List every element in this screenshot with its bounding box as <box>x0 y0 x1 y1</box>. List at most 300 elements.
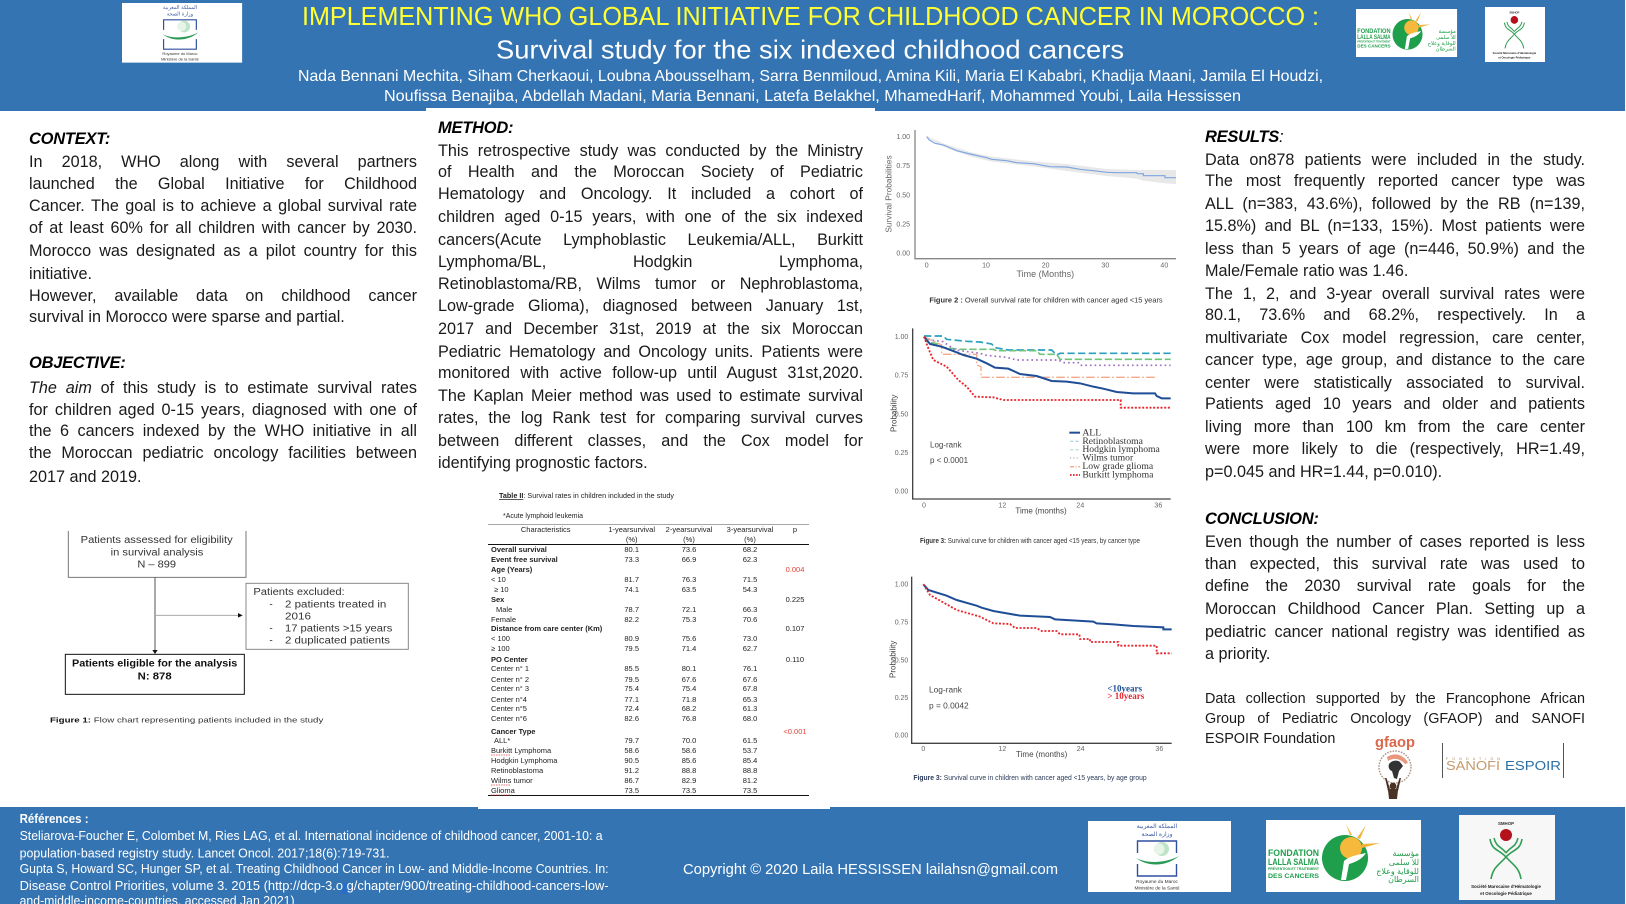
text: method: Retinoblastoma/RB, Wilms tumor or Nephroblastoma, <box>438 275 863 293</box>
y axis labels: 0.50 <box>896 192 910 199</box>
authors: Nada Bennani Mechita, Siham Cherkaoui, Loubna Abousselham, Sarra Benmiloud, Amina Kili, Maria El Kababri, Khadija Maani, Jamila El Houdzi, <box>298 68 1323 85</box>
row labels: Burkitt Lymphoma <box>491 746 552 755</box>
column: 2-year survival: 80.1 <box>682 664 696 673</box>
y axis labels: 0.50 <box>895 411 908 418</box>
caption: figure 2: Figure 2 : Overall survival rate for children with cancer aged <15 years <box>929 296 1163 305</box>
curve: under 10 years <box>923 584 1172 629</box>
text: conclusion: a priority. <box>1205 645 1270 663</box>
box: excluded patients: 17 patients >15 years <box>285 624 392 635</box>
column: 3-year survival: 67.6 <box>743 675 757 684</box>
column: 1-year survival: 82.6 <box>624 714 639 723</box>
heading: context: CONTEXT: <box>29 130 110 148</box>
row labels: Wilms tumor <box>491 776 533 785</box>
references: population-based registry study. Lancet Oncol. 2017;18(6):719-731. <box>20 846 390 860</box>
logo: ministry of health (header): Royaume du Maroc <box>162 51 197 56</box>
logo: fondation lalla salma (footer): DES CANCERS <box>1268 873 1320 880</box>
text: conclusion <box>1205 533 1585 663</box>
row labels: Glioma <box>491 786 516 795</box>
column: 2-year survival: 68.2 <box>682 704 696 713</box>
column: 3-year survival <box>743 545 757 795</box>
panel: method <box>438 119 864 472</box>
column: 2-year survival <box>682 545 696 795</box>
column: 1-year survival: 82.2 <box>624 615 639 624</box>
column: 2-year survival: 73.5 <box>682 786 696 795</box>
copyright: Copyright © 2020 Laila HESSISSEN lailahsn@gmail.com <box>683 861 1058 878</box>
logo: smhop society (header): Société Marocaine d'Hématologie <box>1493 51 1537 55</box>
table header: (%) <box>744 535 756 544</box>
column: 1-year survival: 79.7 <box>624 736 639 745</box>
references <box>20 811 609 904</box>
text: objective: 2017 and 2019. <box>29 468 142 486</box>
column: p values: 0.004 <box>786 565 804 574</box>
log-rank note: p < 0.0001 <box>930 456 969 465</box>
text: method: Low-grade Glioma), diagnosed between January 1st, <box>438 297 863 315</box>
text: results: cancer type, age group, and distance to the care <box>1205 351 1585 369</box>
row labels: Center n°5 <box>491 704 527 713</box>
axis titles: Survival Probabilities <box>884 155 894 233</box>
row labels: < 10 <box>491 575 506 584</box>
y axis labels: 0.50 <box>895 657 908 664</box>
x axis labels: 24 <box>1077 746 1085 753</box>
y axis labels: 1.00 <box>895 582 908 589</box>
column: 3-year survival: 62.3 <box>743 555 757 564</box>
row labels: Retinoblastoma <box>491 766 544 775</box>
y axis labels: 0.25 <box>895 450 908 457</box>
column: 3-year survival: 71.5 <box>743 575 757 584</box>
logo: fondation lalla salma (footer): PRÉVENTION ET TRAITEMENT <box>1268 866 1320 871</box>
text: method: Hematology and Oncology. It included a cohort of <box>438 185 863 203</box>
box: excluded patients: 2016 <box>285 611 312 622</box>
heading: results: RESULTS: <box>1205 128 1283 146</box>
row labels: Overall survival <box>491 545 547 554</box>
text: funding acknowledgement <box>1205 690 1585 746</box>
caption: figure 3: Figure 3: Survival curve for children with cancer aged <15 years, by cancer type <box>920 536 1140 545</box>
text: results <box>1205 151 1585 481</box>
y axis labels <box>895 582 908 740</box>
curve: 10 years and over <box>923 584 1172 653</box>
curve: wilms tumor <box>924 337 1171 365</box>
axis titles <box>884 155 1074 279</box>
axis titles: Time (months) <box>1016 750 1068 759</box>
panel: objective <box>29 354 418 486</box>
text: objective: the Moroccan pediatric oncology facilities between <box>29 444 417 462</box>
logo: fondation lalla salma (footer): للا سلمى <box>1389 858 1419 867</box>
text: results: were more likely to die (respectively, HR=1.49, <box>1205 440 1585 458</box>
text: funding acknowledgement: Group of Pediatric Oncology (GFAOP) and SANOFI <box>1205 710 1585 726</box>
row labels: Center n°4 <box>491 695 527 704</box>
log-rank note <box>929 685 969 710</box>
column: 2-year survival: 66.9 <box>682 555 696 564</box>
column: 3-year survival: 61.5 <box>743 736 757 745</box>
column: 2-year survival: 88.8 <box>682 766 696 775</box>
logo: ministry of health (footer) <box>1088 821 1231 892</box>
column: 2-year survival: 75.6 <box>682 634 696 643</box>
text: method <box>438 142 864 472</box>
text: conclusion: Moroccan Childhood Cancer Plan. Setting up a <box>1205 600 1585 618</box>
row labels: Distance from care center (Km) <box>491 624 603 633</box>
column: 2-year survival: 67.6 <box>682 675 696 684</box>
row labels: ≥ 100 <box>491 644 510 653</box>
text: results: ALL (n=383, 43.6%), followed by the RB (n=139, <box>1205 195 1585 213</box>
y axis labels: 0.75 <box>895 373 908 380</box>
column: 3-year survival: 73.5 <box>743 786 757 795</box>
box: excluded patients: - <box>269 624 273 635</box>
logo: fondation sanofi espoir <box>1442 743 1564 778</box>
text: objective: the 6 cancers indexed by the WHO initiative in all <box>29 422 417 440</box>
text: method: The Kaplan Meier method was used to estimate survival <box>438 387 863 405</box>
column: 2-year survival: 76.3 <box>682 575 696 584</box>
text: method: cancers(Acute Lymphoblastic Leukemia/ALL, Burkitt <box>438 231 863 249</box>
logo: fondation lalla salma (footer): مؤسسة <box>1392 849 1419 858</box>
logo: ministry of health (header) <box>122 3 242 63</box>
column: 1-year survival: 73.5 <box>624 786 639 795</box>
references: Disease Control Priorities, volume 3. 2015 (http://dcp-3.o g/chapter/900/treating-childhood-cancers-low- <box>20 878 609 893</box>
y axis labels: 0.75 <box>895 620 908 627</box>
survival curve <box>927 137 1176 178</box>
column: 3-year survival: 88.8 <box>743 766 757 775</box>
text: method: Pediatric Hematology and Oncology units. Patients were <box>438 343 863 361</box>
row labels: Center n°6 <box>491 714 527 723</box>
column: 1-year survival: 85.5 <box>624 664 639 673</box>
x axis labels: 20 <box>1042 263 1050 270</box>
panel: results <box>1205 128 1585 481</box>
column: 1-year survival: 81.7 <box>624 575 639 584</box>
column: 2-year survival: 72.1 <box>682 605 696 614</box>
box: excluded patients: 2 duplicated patients <box>285 636 390 647</box>
axis titles <box>890 395 1067 515</box>
column: 2-year survival: 70.0 <box>682 736 696 745</box>
y axis labels: 1.00 <box>896 134 910 141</box>
column: 2-year survival: 75.4 <box>682 684 696 693</box>
row labels: Male <box>496 605 512 614</box>
column: p values: <0.001 <box>783 727 807 736</box>
logo: ministry of health (footer): Royaume du Maroc <box>1136 879 1179 885</box>
log-rank note <box>930 440 969 465</box>
column: 3-year survival: 76.1 <box>743 664 757 673</box>
row labels: < 100 <box>491 634 510 643</box>
arrow: to exclusions <box>155 613 243 618</box>
row labels: Center n° 3 <box>491 684 529 693</box>
logo: fondation lalla salma (footer): FONDATION <box>1268 848 1319 858</box>
text: results: less than 5 years of age (n=446, 50.9%) and the <box>1205 240 1585 258</box>
column: 3-year survival: 85.4 <box>743 756 757 765</box>
log-rank note: Log-rank <box>929 685 963 695</box>
box: eligible patients <box>65 654 244 694</box>
text: context: Cancer. The goal is to achieve a global survival rate <box>29 197 417 215</box>
logo: smhop society (footer): et Oncologie Pédiatrique <box>1480 891 1532 896</box>
column: 2-year survival: 71.4 <box>682 644 696 653</box>
column: 3-year survival: 70.6 <box>743 615 757 624</box>
text: objective: The aim of this study is to estimate survival rates <box>29 378 417 396</box>
logo: smhop society (footer) <box>1459 815 1555 900</box>
table header: 2-yearsurvival <box>666 525 713 534</box>
logo: fondation lalla salma (header): PRÉVENTION ET TRAITEMENT <box>1357 40 1391 43</box>
log-rank note: Log-rank <box>930 440 963 449</box>
box: assessed patients: Patients assessed for eligibility <box>81 535 233 546</box>
column: 1-year survival: 79.5 <box>624 644 639 653</box>
logo: smhop society (header) <box>1485 7 1545 62</box>
text: method: children aged 0-15 years, with one of the six indexed <box>438 208 863 226</box>
log-rank note: p = 0.0042 <box>929 700 969 710</box>
legend <box>1069 427 1161 480</box>
logo: ministry of health (header): Ministère de la Santé <box>161 57 200 62</box>
logo: fondation lalla salma (header): DES CANCERS <box>1357 44 1391 49</box>
box: excluded patients: Patients excluded: <box>253 587 345 598</box>
table title: Table II: Survival rates in children included in the study <box>499 491 674 500</box>
box: assessed patients <box>68 531 246 577</box>
text: results: The most frequently reported cancer type was <box>1205 172 1585 190</box>
y axis labels: 0.00 <box>896 251 910 258</box>
logo: gfaop <box>1375 735 1415 799</box>
table header: (%) <box>683 535 695 544</box>
legend: Hodgkin lymphoma <box>1082 444 1161 455</box>
logo: fondation lalla salma (footer): LALLA SALMA <box>1268 857 1319 867</box>
column: p values: 0.225 <box>786 595 804 604</box>
column: 3-year survival: 65.3 <box>743 695 757 704</box>
chart: figure 2 overall survival <box>884 130 1176 305</box>
row labels: Sex <box>491 595 505 604</box>
column: 2-year survival: 76.8 <box>682 714 696 723</box>
column: 3-year survival: 62.7 <box>743 644 757 653</box>
x axis labels: 12 <box>998 746 1006 753</box>
column: 3-year survival: 81.2 <box>743 776 757 785</box>
panel: context <box>29 130 417 326</box>
legend <box>1107 683 1145 701</box>
y axis labels: 0.00 <box>895 733 908 740</box>
legend: Burkitt lymphoma <box>1082 469 1154 480</box>
x axis labels <box>921 746 1163 753</box>
row labels: Female <box>491 615 516 624</box>
x axis labels: 36 <box>1155 746 1163 753</box>
y axis labels: 1.00 <box>895 334 908 341</box>
text: results: Patients aged 10 years and older and patients <box>1205 395 1585 413</box>
logo: fondation lalla salma (header) <box>1356 9 1457 57</box>
column: 1-year survival: 79.5 <box>624 675 639 684</box>
text: method: between different classes, and the Cox model for <box>438 432 863 450</box>
subtitle: Survival study for the six indexed childhood cancers <box>496 34 1124 64</box>
x axis labels: 0 <box>921 746 925 753</box>
row labels: Center n° 2 <box>491 675 529 684</box>
arrow: down <box>152 577 158 654</box>
text: results: 80.1, 73.6% and 68.2%, respectively. In a <box>1205 306 1585 324</box>
references: Références : <box>20 811 89 826</box>
logo: fondation lalla salma (footer): للوقاية وعلاج <box>1376 867 1419 876</box>
logo: ministry of health (header): المملكة المغربية <box>163 5 197 11</box>
row labels: ≥ 10 <box>494 585 509 594</box>
logo: smhop society (footer): Société Marocaine d'Hématologie <box>1471 884 1541 889</box>
x axis labels: 40 <box>1160 263 1168 270</box>
text: conclusion: Even though the number of cases reported is less <box>1205 533 1585 551</box>
table header: Characteristics <box>521 525 571 534</box>
logo: smhop society (footer): SMHOP <box>1498 821 1514 826</box>
authors <box>298 68 1323 105</box>
column: 3-year survival: 68.0 <box>743 714 757 723</box>
x axis labels: 30 <box>1101 263 1109 270</box>
column: 2-year survival: 58.6 <box>682 746 696 755</box>
table: survival rates <box>488 491 809 796</box>
x axis labels: 0 <box>925 263 929 270</box>
y axis labels: 0.00 <box>895 489 908 496</box>
column: p values: 0.110 <box>786 655 804 664</box>
curve: hodgkin lymphoma <box>924 337 1171 359</box>
axis titles: Time (Months) <box>1016 269 1074 279</box>
curve: all <box>924 337 1171 398</box>
text: results: Male/Female ratio was 1.46. <box>1205 262 1408 280</box>
references: Gupta S, Howard SC, Hunger SP, et al. Treating Childhood Cancer in Low- and Middle-Income Countries. In: <box>20 861 609 876</box>
text: funding acknowledgement: ESPOIR Foundation <box>1205 730 1335 746</box>
text: context: survival in Morocco were sparse and partial. <box>29 308 345 326</box>
text: results: The 1, 2, and 3-year overall survival rates were <box>1205 285 1585 303</box>
heading: conclusion: CONCLUSION: <box>1205 510 1319 528</box>
column: p values: 0.107 <box>786 624 804 633</box>
logo: fondation sanofi espoir: SANOFI <box>1446 759 1500 773</box>
y axis labels <box>896 134 910 258</box>
table header: 1-yearsurvival <box>608 525 655 534</box>
column: 1-year survival: 74.1 <box>624 585 639 594</box>
x axis labels: 12 <box>998 502 1006 509</box>
footer band <box>0 807 1626 904</box>
column: 3-year survival: 67.8 <box>743 684 757 693</box>
legend: ALL <box>1082 427 1101 438</box>
text: method: rates, the log Rank test for comparing survival curves <box>438 409 863 427</box>
table header: p <box>793 525 797 534</box>
y axis labels: 0.25 <box>896 221 910 228</box>
heading: method: METHOD: <box>438 119 513 137</box>
chart: figure 3 survival by age group <box>888 576 1172 782</box>
table header: (%) <box>626 535 638 544</box>
logo: ministry of health (footer): Ministère de la Santé <box>1134 886 1180 892</box>
column: 1-year survival: 75.4 <box>624 684 639 693</box>
text: objective <box>29 378 418 486</box>
heading: objective: OBJECTIVE: <box>29 354 126 372</box>
column: 3-year survival: 73.0 <box>743 634 757 643</box>
y axis labels: 0.75 <box>896 163 910 170</box>
text: method: of Health and the Moroccan Society of Pediatric <box>438 163 863 181</box>
text: results: multivariate Cox model regression, care center, <box>1205 329 1585 347</box>
text: results: Data on878 patients were included in the study. <box>1205 151 1585 169</box>
axis titles: Probability <box>890 395 899 432</box>
row labels: Age (Years) <box>491 565 533 574</box>
box: excluded patients <box>246 583 408 649</box>
column: 1-year survival: 80.1 <box>624 545 639 554</box>
title: IMPLEMENTING WHO GLOBAL INITIATIVE FOR CHILDHOOD CANCER IN MOROCCO : <box>302 1 1319 31</box>
column: 2-year survival: 75.3 <box>682 615 696 624</box>
box: assessed patients: N – 899 <box>137 560 176 571</box>
row labels: PO Center <box>491 655 528 664</box>
x axis labels: 36 <box>1154 502 1162 509</box>
table header: 3-yearsurvival <box>727 525 774 534</box>
row labels: Center n° 1 <box>491 664 529 673</box>
x axis labels <box>922 502 1162 509</box>
table header <box>521 525 797 544</box>
logo: fondation lalla salma (footer): السرطان <box>1388 875 1419 884</box>
text: context: Morocco was designated as a pilot country for this <box>29 242 417 260</box>
header band <box>0 0 1626 111</box>
logo: fondation lalla salma (header): LALLA SALMA <box>1357 35 1391 41</box>
text: conclusion: than expected, this survival rate was used to <box>1205 555 1585 573</box>
logo: fondation sanofi espoir: ESPOIR <box>1505 759 1561 773</box>
text: results: center were statistically associated to survival. <box>1205 374 1585 392</box>
text: method: This retrospective study was conducted by the Ministry <box>438 142 863 160</box>
authors: Noufissa Benajiba, Abdellah Madani, Maria Bennani, Latefa Belakhel, MhamedHarif, Mohammed Youbi, Laila Hessissen <box>384 88 1241 105</box>
legend: Retinoblastoma <box>1082 436 1144 447</box>
text: results: living more than 100 km from the care center <box>1205 418 1585 436</box>
logo: ministry of health (header): وزارة الصحة <box>167 12 194 18</box>
logo: fondation lalla salma (header): للا سلمى <box>1436 35 1456 41</box>
axis titles: Time (months) <box>1015 506 1067 515</box>
column: 3-year survival: 54.3 <box>743 585 757 594</box>
text: context: launched the Global Initiative for Childhood <box>29 175 417 193</box>
axis titles <box>888 641 1068 759</box>
column: 3-year survival: 66.3 <box>743 605 757 614</box>
column: 1-year survival: 77.1 <box>624 695 639 704</box>
column: 3-year survival: 53.7 <box>743 746 757 755</box>
text: method: Lymphoma/BL, Hodgkin Lymphoma, <box>438 253 863 271</box>
column: 1-year survival: 91.2 <box>624 766 639 775</box>
column: p values <box>783 565 807 736</box>
legend: <10years <box>1107 683 1142 693</box>
logo: smhop society (header): SMHOP <box>1509 10 1520 14</box>
logo: fondation lalla salma (header): السرطان <box>1436 46 1456 52</box>
text: objective: for children aged 0-15 years, diagnosed with one of <box>29 401 417 419</box>
text: method: identifying prognostic factors. <box>438 454 648 472</box>
column: 1-year survival: 78.7 <box>624 605 639 614</box>
table note: *Acute lymphoid leukemia <box>503 511 584 520</box>
text: context: of at least 60% for all children with cancer by 2030. <box>29 219 417 237</box>
text: context: initiative. <box>29 265 92 283</box>
logo: fondation lalla salma (header): FONDATION <box>1357 29 1391 35</box>
curve: burkitt lymphoma <box>924 337 1171 408</box>
axes <box>915 130 1176 259</box>
references: Steliarova-Foucher E, Colombet M, Ries LAG, et al. International incidence of childhood cancer, 2001-10: a <box>20 828 603 843</box>
row labels: Cancer Type <box>491 727 535 736</box>
column: 1-year survival: 80.9 <box>624 634 639 643</box>
panel: conclusion <box>1205 510 1585 663</box>
column: 2-year survival: 73.6 <box>682 545 696 554</box>
x axis labels: 0 <box>922 502 926 509</box>
text: results: p=0.045 and HR=1.44, p=0.010). <box>1205 463 1442 481</box>
text: context <box>29 153 417 326</box>
logo: smhop society (header): et Oncologie Pédiatrique <box>1498 56 1531 60</box>
text: method: monitored with active follow-up until August 31st,2020. <box>438 364 863 382</box>
axes <box>912 577 1172 743</box>
column: 1-year survival: 58.6 <box>624 746 639 755</box>
column: 1-year survival: 90.5 <box>624 756 639 765</box>
text: funding acknowledgement: Data collection supported by the Francophone African <box>1205 690 1585 706</box>
confidence band <box>927 136 1176 184</box>
logo: fondation lalla salma (footer) <box>1266 820 1421 892</box>
caption: figure 1: Figure 1: Flow chart representing patients included in the study <box>50 715 324 724</box>
column: 1-year survival: 73.3 <box>624 555 639 564</box>
column: 2-year survival: 85.6 <box>682 756 696 765</box>
box: eligible patients: Patients eligible for the analysis <box>72 659 238 670</box>
axis titles: Probability <box>888 641 897 678</box>
column: 3-year survival: 68.2 <box>743 545 757 554</box>
axes <box>913 328 1171 499</box>
text: method: 2017 and December 31st, 2019 at the six Moroccan <box>438 320 863 338</box>
text: context: However, available data on childhood cancer <box>29 286 417 304</box>
box: assessed patients: in survival analysis <box>111 547 203 558</box>
column: 1-year survival: 86.7 <box>624 776 639 785</box>
curve: low grade glioma <box>924 337 1157 377</box>
logo: ministry of health (footer): وزارة الصحة <box>1142 831 1173 838</box>
box: eligible patients: N: 878 <box>138 671 172 682</box>
column: 1-year survival <box>624 545 639 795</box>
text: conclusion: pediatric cancer national registry was identified as <box>1205 623 1585 641</box>
column: 1-year survival: 72.4 <box>624 704 639 713</box>
row labels <box>491 545 603 795</box>
x axis labels: 24 <box>1076 502 1084 509</box>
